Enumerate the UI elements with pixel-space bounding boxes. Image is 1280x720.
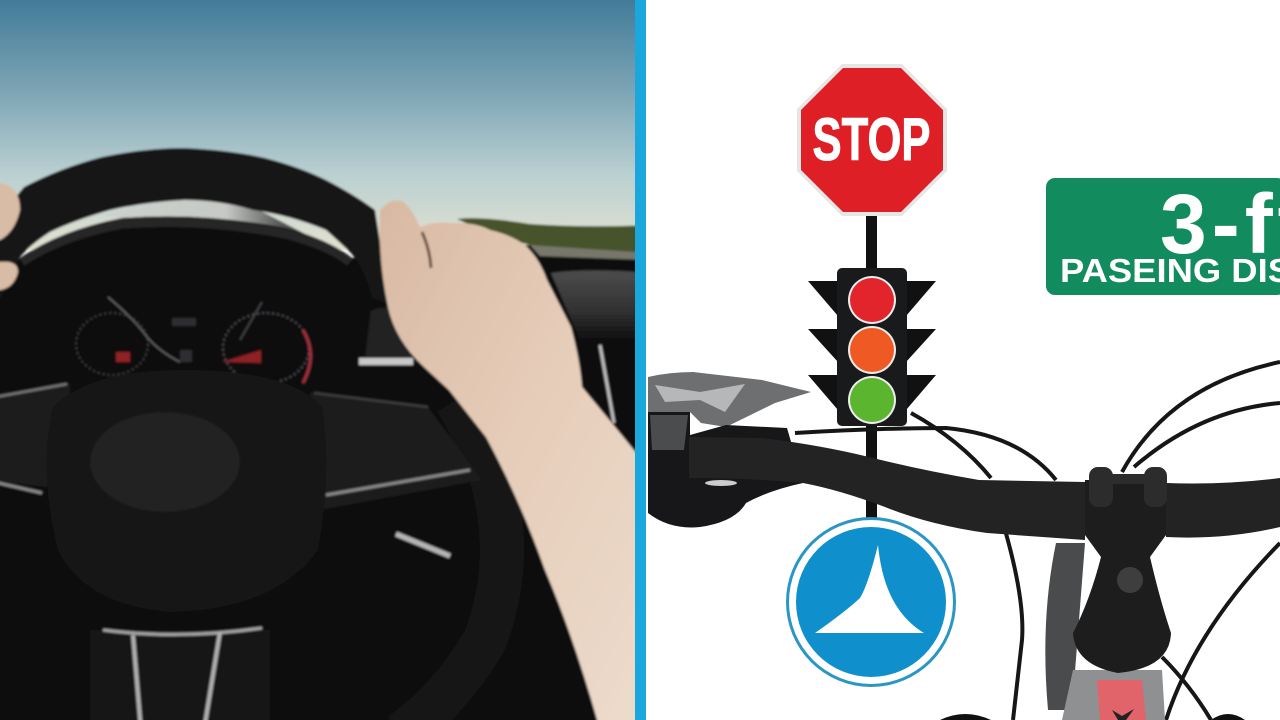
traffic light: [808, 268, 936, 426]
handlebar left section: [689, 437, 1085, 540]
handlebar right section: [1166, 478, 1280, 538]
steering wheel rim: [0, 148, 390, 305]
divider: cyan band: [635, 0, 646, 720]
green distance sign: PASEING DIS: [1060, 252, 1280, 289]
bicycle stem: [940, 467, 1245, 720]
steering wheel spokes: [0, 383, 70, 490]
distant treeline: [457, 218, 650, 253]
green distance sign: [1046, 177, 1280, 295]
lower spoke: [90, 630, 270, 720]
stop sign: STOP: [812, 106, 930, 173]
panel: driver view: [0, 0, 650, 720]
bicycle handlebar: [648, 412, 1280, 540]
sign pole: [866, 210, 877, 520]
hand: right hand and arm: [380, 200, 650, 720]
blue circular sign: [786, 517, 956, 687]
red frame badge: [1097, 680, 1146, 720]
silver dashboard trim: [359, 358, 413, 365]
air vent: [600, 345, 614, 423]
silver brake mount: [648, 372, 811, 427]
bicycle frame: [1062, 670, 1165, 720]
steering wheel hub: [47, 370, 326, 612]
brake lever: [648, 412, 803, 527]
car dashboard: [0, 245, 650, 720]
sky: [0, 0, 646, 250]
stop sign: [797, 64, 947, 216]
panel: cyclist view: [646, 0, 1280, 720]
hand: left fingers: [0, 183, 20, 290]
bicycle tyre: [1045, 543, 1085, 710]
brake cables: [795, 362, 1280, 720]
dashboard hood: [20, 216, 372, 400]
steering wheel lower rim: [400, 400, 502, 720]
light strip under wheel rim: [100, 201, 352, 258]
hood highlight: [22, 222, 350, 262]
instrument cluster: [76, 297, 310, 383]
